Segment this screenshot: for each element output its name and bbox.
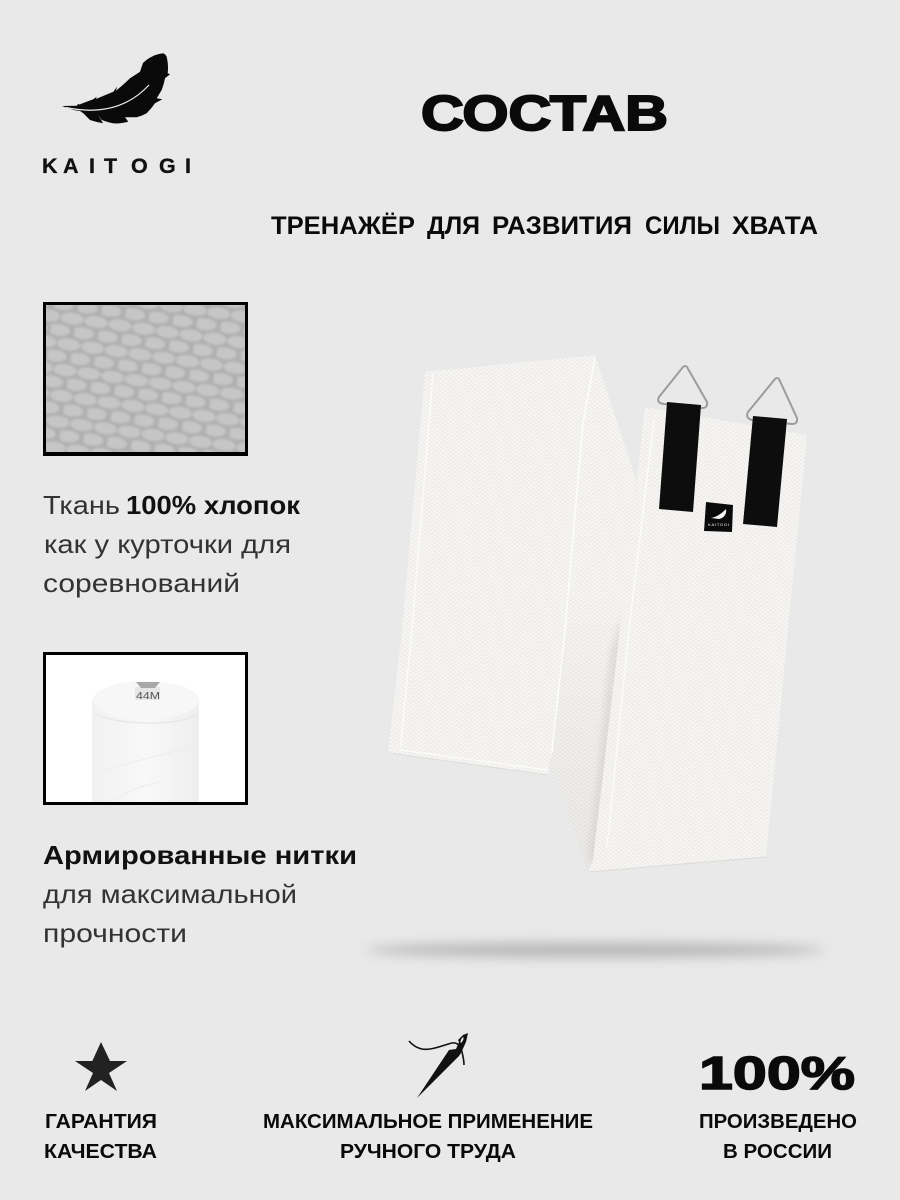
- text block: threads: прочности: [43, 918, 187, 948]
- icon: feather: [62, 53, 170, 123]
- text block: fabric: как у курточки для: [44, 529, 291, 559]
- brand name: KAITOGI: [42, 154, 191, 178]
- inner fold shadow: [590, 610, 624, 860]
- badge: handwork: МАКСИМАЛЬНОЕ ПРИМЕНЕНИЕ: [263, 1111, 593, 1133]
- badge: quality guarantee: [44, 1042, 157, 1163]
- text block: fabric: Ткань: [43, 490, 120, 520]
- subtitle: ДЛЯ: [427, 212, 480, 240]
- text block: threads: для максимальной: [43, 879, 297, 909]
- fold strip: [550, 355, 636, 872]
- badge: made in Russia: [699, 1047, 857, 1163]
- subtitle: [271, 212, 818, 240]
- badge: quality guarantee: КАЧЕСТВА: [44, 1141, 157, 1163]
- text block: fabric: 100% хлопок: [126, 490, 301, 520]
- panel: thread spool: [44, 654, 246, 804]
- icon: needle and thread: [409, 1033, 468, 1098]
- title: СОСТАВ: [421, 87, 668, 141]
- rings: [658, 366, 797, 424]
- badge: made in Russia: 100%: [699, 1047, 855, 1099]
- subtitle: ХВАТА: [732, 212, 818, 240]
- product: grip trainer strap: [388, 355, 807, 872]
- left panel: [388, 355, 595, 775]
- subtitle: РАЗВИТИЯ: [492, 212, 632, 240]
- straps: [659, 402, 701, 512]
- text block: threads: Армированные нитки: [43, 840, 357, 870]
- panel: fabric swatch: [40, 300, 252, 460]
- subtitle: СИЛЫ: [645, 212, 720, 240]
- subtitle: ТРЕНАЖЁР: [271, 212, 415, 240]
- text block: fabric: [43, 490, 301, 598]
- icon: spool: 44M: [136, 691, 160, 702]
- sewn label: [704, 502, 733, 532]
- icon: star: [75, 1042, 127, 1091]
- right panel: [588, 407, 807, 872]
- badge: quality guarantee: ГАРАНТИЯ: [45, 1111, 157, 1133]
- logo: Kaitogi: [42, 53, 191, 178]
- badge: handwork: РУЧНОГО ТРУДА: [340, 1141, 516, 1163]
- sewn label: KAITOGI: [708, 522, 729, 527]
- text block: fabric: соревнований: [43, 568, 240, 598]
- badge: made in Russia: ПРОИЗВЕДЕНО: [699, 1111, 857, 1133]
- badge: handwork: [263, 1033, 593, 1163]
- text block: threads: [43, 840, 357, 948]
- badge: made in Russia: В РОССИИ: [723, 1141, 832, 1163]
- product shadow: [365, 943, 825, 957]
